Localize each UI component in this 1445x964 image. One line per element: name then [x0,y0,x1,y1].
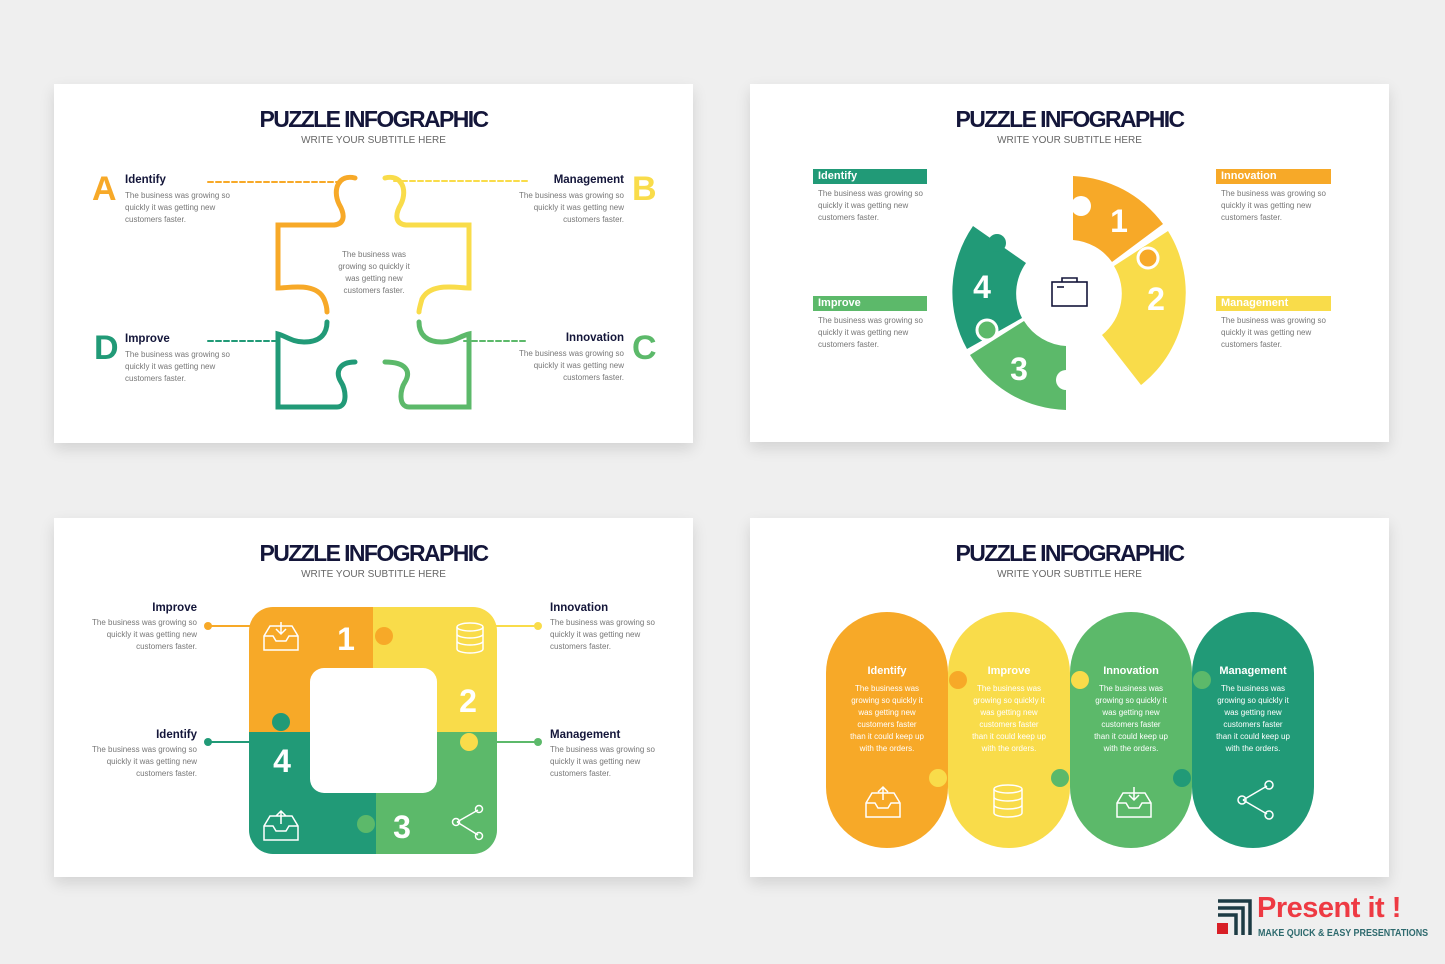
square puzzle chart: 4 [273,743,291,779]
label: Improve: Improve [818,297,861,309]
pill: Identify: Identify [867,665,907,677]
text block: Management: The business was growing so quickly it was getting new customers faster. [519,191,624,224]
logo: Present it [1217,892,1428,939]
pill: Management: Management [1219,665,1287,677]
label: Innovation [1216,169,1331,184]
panel: bottom-right pill puzzle [750,518,1389,877]
letter D: D [94,329,119,367]
title: PUZZLE INFOGRAPHIC [259,106,488,132]
square puzzle chart: 3 [393,809,411,845]
text block: Innovation [550,602,655,651]
text block: Innovation: The business was growing so quickly it was getting new customers faster. [550,618,655,651]
pill: Management: The business was growing so quickly it was getting new customers faster than it could keep up with the orders. [1216,684,1290,753]
text block: Innovation [519,332,624,382]
panel: bottom-left square puzzle [54,518,693,877]
title: PUZZLE INFOGRAPHIC [955,106,1184,132]
text: Improve: The business was growing so quickly it was getting new customers faster. [818,316,923,349]
label: Management [1216,296,1331,311]
text block: Management [550,729,655,778]
ring puzzle chart: 1 [1110,203,1128,239]
text block: Identify [92,729,197,778]
panel: top-left outline puzzle [54,84,693,443]
pill: Improve: The business was growing so quickly it was getting new customers faster than it could keep up with the orders. [972,684,1046,753]
letter C: C [632,329,657,367]
text block: Improve: The business was growing so quickly it was getting new customers faster. [125,350,230,383]
text block: Management: Management [554,174,624,186]
subtitle: WRITE YOUR SUBTITLE HERE [997,135,1142,146]
text block: Improve [92,602,197,651]
puzzle outline chart [207,174,528,410]
text block: Identify: The business was growing so quickly it was getting new customers faster. [92,745,197,778]
text: Identify: The business was growing so quickly it was getting new customers faster. [818,189,923,222]
subtitle: WRITE YOUR SUBTITLE HERE [997,569,1142,580]
pill: Innovation [1070,612,1192,848]
label: Improve [813,296,927,311]
pill: Improve: Improve [988,665,1030,677]
subtitle: WRITE YOUR SUBTITLE HERE [301,569,446,580]
text block: Innovation: Innovation [566,332,624,344]
text block: Improve: Improve [125,333,170,345]
pill: Identify [826,612,948,848]
pill: Improve [948,612,1070,848]
letter B: B [632,170,657,208]
text block: Improve: The business was growing so quickly it was getting new customers faster. [92,618,197,651]
square puzzle chart [204,607,542,854]
text block: Identify: The business was growing so quickly it was getting new customers faster. [125,191,230,224]
pill: Innovation: Innovation [1103,665,1159,677]
panel: top-right ring puzzle [750,84,1389,442]
label: Innovation: Innovation [1221,170,1277,182]
ring puzzle chart: 2 [1147,281,1165,317]
ring puzzle chart: 3 [1010,351,1028,387]
label: Identify: Identify [818,170,857,182]
text block: Innovation: The business was growing so quickly it was getting new customers faster. [519,349,624,382]
pill: Identify: The business was growing so quickly it was getting new customers faster than it could keep up with the orders. [850,684,924,753]
text block: Improve: Improve [152,602,197,614]
text block: Identify [125,174,230,224]
text block: Management [519,174,624,224]
letter A: A [92,170,117,208]
subtitle: WRITE YOUR SUBTITLE HERE [301,135,446,146]
text: Management: The business was growing so quickly it was getting new customers faster. [1221,316,1326,349]
text block: Management: The business was growing so quickly it was getting new customers faster. [550,745,655,778]
icon: logo mark [1217,899,1252,935]
label: Management: Management [1221,297,1288,309]
center text: The business was growing so quickly it was getting new customers faster. [338,250,410,295]
text block: Identify: Identify [125,174,166,186]
text block: Innovation: Innovation [550,602,608,614]
text block: Management: Management [550,729,620,741]
pill: Innovation: The business was growing so quickly it was getting new customers faster than it could keep up with the orders. [1094,684,1168,753]
text block: Improve [125,333,230,383]
title: PUZZLE INFOGRAPHIC [955,540,1184,566]
pill: Management [1192,612,1314,848]
square puzzle chart: 2 [459,683,477,719]
ring puzzle chart: 4 [973,269,991,305]
title: PUZZLE INFOGRAPHIC [259,540,488,566]
square puzzle chart: 1 [337,621,355,657]
text block: Identify: Identify [156,729,197,741]
logo tagline: MAKE QUICK & EASY PRESENTATIONS [1258,927,1428,939]
text: Innovation: The business was growing so quickly it was getting new customers faster. [1221,189,1326,222]
label: Identify [813,169,927,184]
logo text: Present it ! [1257,892,1401,924]
